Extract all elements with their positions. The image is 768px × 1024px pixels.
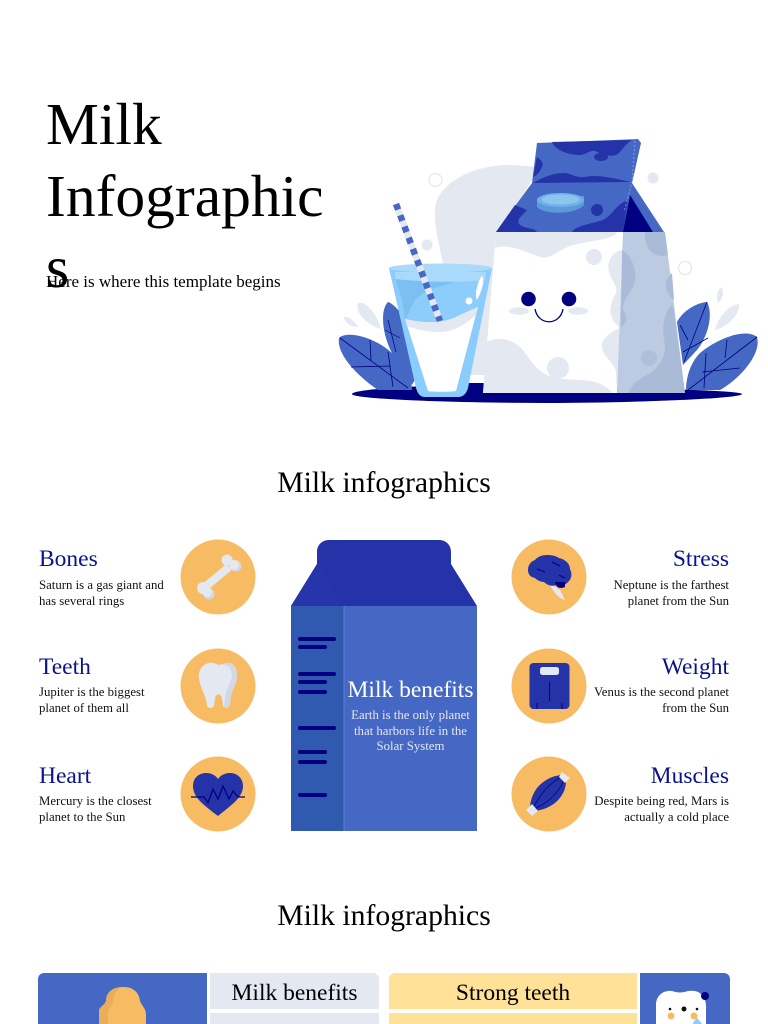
heart text: planet to the Sun <box>39 810 125 824</box>
heart text <box>39 763 152 824</box>
heart text: Heart <box>39 763 91 789</box>
carton heading: Milk benefits <box>348 677 473 703</box>
carton description: Solar System <box>377 739 444 753</box>
icon: heart <box>180 756 256 832</box>
carton roof <box>496 139 664 232</box>
subtitle: Here is where this template begins <box>46 272 281 291</box>
carton description <box>351 708 470 753</box>
ground shadow <box>352 383 742 403</box>
icon: weight scale <box>512 648 586 724</box>
stress description <box>614 578 729 608</box>
section heading 2: Milk infographics <box>277 900 491 932</box>
weight description <box>594 685 729 714</box>
teeth text <box>39 654 145 714</box>
bottle cap <box>537 193 584 213</box>
icon: tooth <box>180 648 256 724</box>
icon: milk bottle <box>99 987 146 1024</box>
glass <box>389 204 492 397</box>
gray text card <box>210 1013 379 1024</box>
panel: blue image card left <box>38 973 207 1024</box>
icon: cute tooth <box>656 990 709 1024</box>
leaves right <box>677 302 758 390</box>
title: Milk <box>46 91 162 157</box>
title: s <box>46 234 69 300</box>
milk benefits label <box>210 973 379 1009</box>
carton measure lines <box>300 639 334 795</box>
stress description: planet from the Sun <box>628 594 729 608</box>
muscles description: Despite being red, Mars is <box>594 794 729 808</box>
bones text <box>39 546 164 608</box>
carton front <box>483 232 623 393</box>
teeth text: planet of them all <box>39 700 129 714</box>
yellow text card <box>389 1013 637 1024</box>
teeth text: Jupiter is the biggest <box>39 685 145 699</box>
muscles text: Muscles <box>651 763 729 789</box>
title <box>46 91 324 300</box>
weight description: from the Sun <box>662 700 729 714</box>
heart text: Mercury is the closest <box>39 794 152 808</box>
icon: muscle <box>512 756 586 832</box>
milk benefits label: Milk benefits <box>232 980 357 1006</box>
weight description: Venus is the second planet <box>594 685 729 699</box>
bones text: has several rings <box>39 594 124 608</box>
muscles description: actually a cold place <box>624 810 729 824</box>
bones text: Bones <box>39 546 98 572</box>
carton description: Earth is the only planet <box>351 708 470 722</box>
strong teeth label: Strong teeth <box>456 980 570 1006</box>
stress description: Neptune is the farthest <box>614 578 729 592</box>
strong teeth label <box>389 973 637 1009</box>
muscles description <box>594 794 729 824</box>
carton description: that harbors life in the <box>354 724 467 738</box>
decorative bubbles <box>344 172 739 330</box>
stress text: Stress <box>673 546 729 572</box>
icon: bone <box>180 540 256 614</box>
carton side <box>617 232 685 393</box>
teeth text: Teeth <box>39 654 91 680</box>
carton face <box>509 292 588 322</box>
section heading 1: Milk infographics <box>277 467 491 499</box>
title: Infographic <box>46 162 324 228</box>
icon: brain <box>512 540 586 614</box>
panel: central milk carton <box>291 540 477 831</box>
panel: blue image card right <box>640 973 730 1024</box>
bones text: Saturn is a gas giant and <box>39 578 164 592</box>
background splash <box>435 165 540 375</box>
weight text: Weight <box>662 654 729 680</box>
leaves left <box>339 302 420 390</box>
straw <box>396 204 440 321</box>
